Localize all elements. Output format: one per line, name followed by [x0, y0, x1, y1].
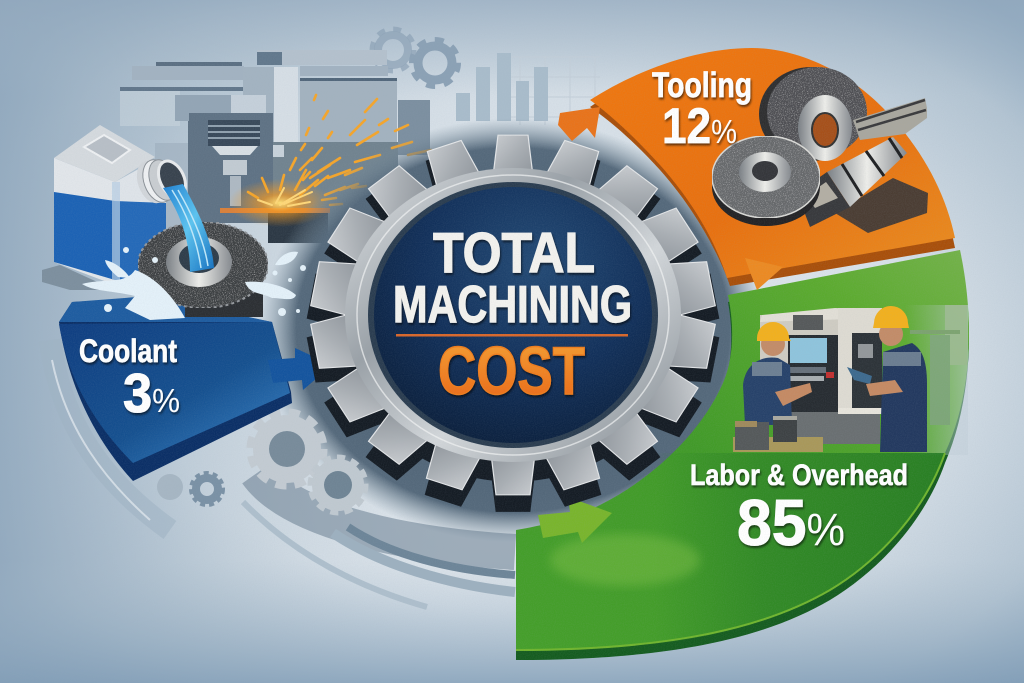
tooling label: Tooling: [652, 66, 752, 105]
labor label: Labor & Overhead: [690, 459, 908, 492]
gear: [306, 135, 720, 512]
title: TOTAL: [433, 221, 595, 285]
faded factory at right: [905, 305, 968, 455]
background gears bottom left: [157, 413, 365, 512]
panel: coolant segment: [59, 296, 292, 481]
title: [393, 221, 632, 409]
icon: grinding wheel back: [759, 67, 867, 161]
blue wedge face: [59, 322, 290, 463]
gear ring: [345, 168, 681, 462]
orange wedge face: [590, 48, 955, 278]
coolant label: Coolant: [79, 333, 177, 369]
splash: [82, 247, 306, 320]
icon: workpieces on table: [733, 416, 823, 452]
labor value: 85%: [737, 486, 845, 559]
icon: worker right: [847, 306, 927, 452]
lower left swooshes: [50, 340, 515, 607]
icon: CNC machine: [760, 308, 882, 444]
machine tool backdrop: [120, 50, 430, 243]
icon: grinding wheel with coolant: [82, 184, 306, 320]
green wedge face: [516, 250, 969, 650]
background gears top: [372, 29, 458, 86]
background grid and bar chart: [456, 53, 600, 125]
sparks: [228, 95, 431, 227]
coolant stream: [163, 184, 214, 272]
gear center disc: [368, 182, 658, 448]
dark halo behind gear: [261, 118, 765, 542]
arrow: labor: [538, 497, 612, 543]
arrow: coolant: [268, 348, 332, 390]
gear shadow: [306, 144, 720, 512]
icon: worker left: [743, 322, 812, 425]
tooling value: 12%: [662, 98, 737, 154]
arrow: tooling upper: [558, 107, 600, 141]
arrow: tooling lower: [745, 258, 783, 290]
coolant value: 3%: [123, 362, 180, 424]
panel: tooling segment: [590, 48, 955, 286]
gear teeth: [310, 135, 716, 495]
title line three: COST: [438, 333, 585, 409]
icon: end mill: [797, 98, 927, 227]
icon: coolant jug: [42, 125, 191, 290]
icon: grinding wheel front: [712, 136, 820, 226]
lower panel shade: [640, 453, 945, 646]
light speckle area: [550, 534, 700, 586]
panel: labor and overhead segment: [516, 250, 969, 660]
outer edge highlight: [516, 453, 945, 650]
title line two: MACHINING: [393, 276, 632, 334]
icon: dark block: [835, 178, 928, 233]
